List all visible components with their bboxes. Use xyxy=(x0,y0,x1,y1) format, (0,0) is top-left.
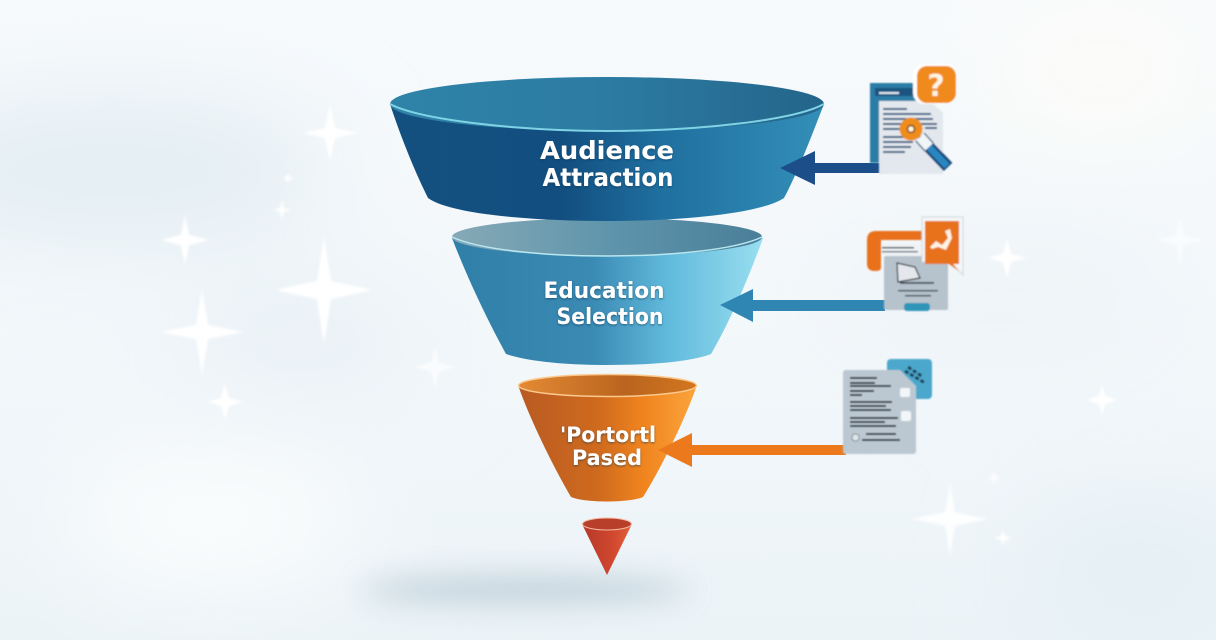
label: Pased xyxy=(572,446,642,470)
funnel tier 3: Portortl Pased xyxy=(518,374,697,502)
icon: orange chart card with document xyxy=(867,217,963,311)
funnel tier 4: red tip xyxy=(582,518,632,575)
arrow: document to tier 2 xyxy=(720,289,885,322)
label: Selection xyxy=(556,305,664,330)
icon: orange speech card xyxy=(922,217,963,275)
decorative stars xyxy=(160,105,1206,556)
icon: magnifier xyxy=(900,118,948,167)
label: Audience xyxy=(540,136,674,165)
icon: checklist document with teal card xyxy=(843,359,932,454)
ground shadow xyxy=(360,575,690,605)
icon: question badge: ? xyxy=(927,69,945,104)
arrow: document to tier 3 xyxy=(658,433,846,467)
label: 'Portortl xyxy=(560,423,656,447)
icon: document with magnifier and question mark xyxy=(870,64,957,174)
arrow: document to tier 1 xyxy=(780,151,884,185)
label: Education xyxy=(544,279,664,304)
label: Attraction xyxy=(542,163,674,192)
funnel tier 1: Audience Attraction xyxy=(390,77,824,221)
funnel tier 2: Education Selection xyxy=(452,218,763,365)
